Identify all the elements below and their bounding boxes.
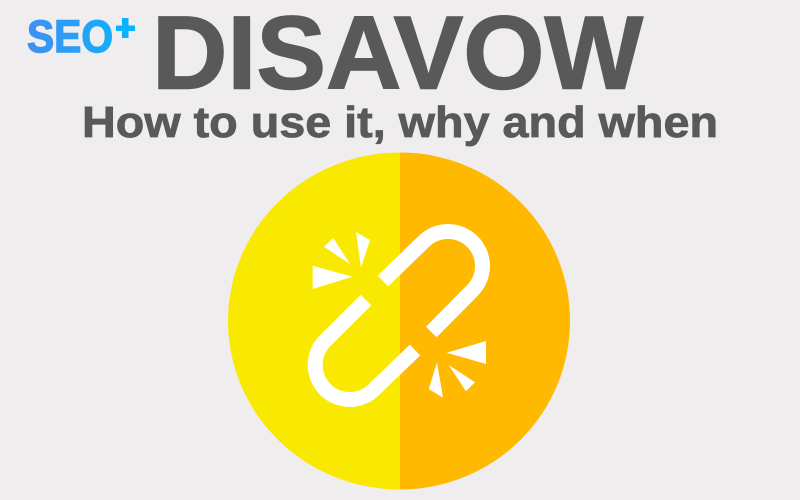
circle right half (400, 152, 570, 490)
subtitle: How to use it, why and when (82, 98, 718, 147)
logo: SEO+: SEO (27, 11, 113, 62)
circle left half (228, 152, 400, 490)
upper left spark lines (313, 232, 370, 289)
upper link segment (383, 232, 482, 332)
icon: broken link badge (228, 152, 570, 490)
lower right spark lines (429, 341, 486, 398)
lower link segment (315, 300, 415, 400)
